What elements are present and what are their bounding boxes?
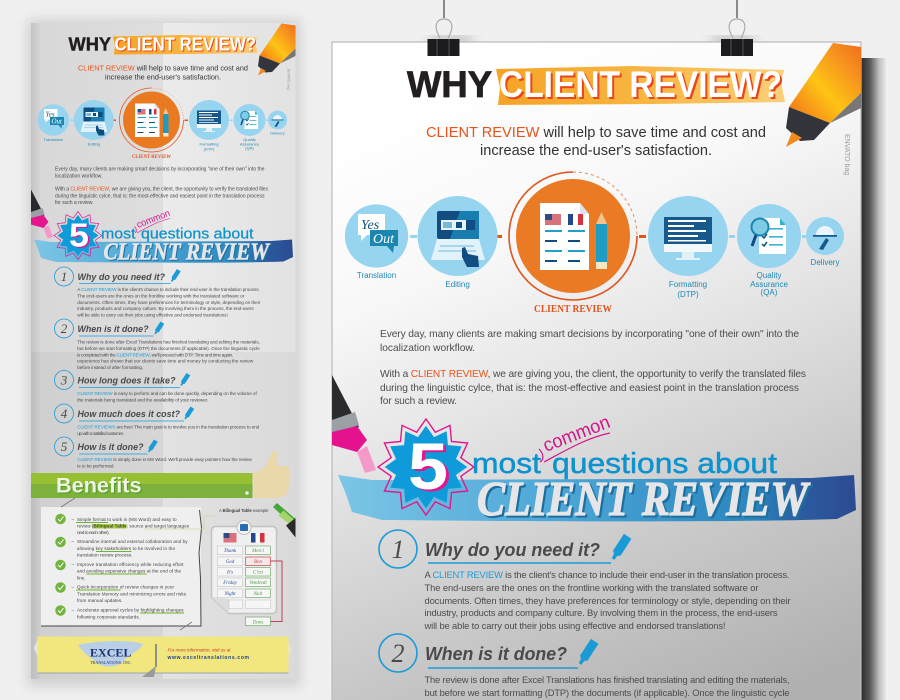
question 2: 2 xyxy=(61,321,68,336)
question 1: will be able to carry out their jobs using effective and endorsed translations! xyxy=(77,312,228,318)
question 3: 3 xyxy=(60,372,68,388)
benefits banner: Benefits xyxy=(56,474,141,498)
common: common xyxy=(135,208,172,231)
subtitle xyxy=(78,65,248,80)
question 3 xyxy=(54,370,257,402)
heading: 5 most common questions about client review: CLIENT REVIEW xyxy=(479,473,813,528)
title: CLIENT REVIEW? xyxy=(116,34,257,56)
question 1: documents. Often times, they have preferences for terminology or style, depending on their xyxy=(424,595,790,606)
benefit items: – xyxy=(72,539,74,544)
benefit items: Improve translation efficiency while reducing effort xyxy=(77,562,184,567)
question 2: is completed with the CLIENT REVIEW, we'll proceed with DTP. Time and time again, xyxy=(77,352,233,358)
highlights xyxy=(76,522,184,613)
title: CLIENT REVIEW? xyxy=(501,66,784,107)
panel: benefits checklist note xyxy=(41,498,217,630)
label: quality assurance: Assurance xyxy=(750,280,788,289)
footer banner: www.exceltranslations.com xyxy=(166,655,250,661)
question 1: 1 xyxy=(61,269,67,284)
question 4 xyxy=(54,404,260,436)
icon: translation xyxy=(37,104,69,136)
question 1: will be able to carry out their jobs using effective and endorsed translations! xyxy=(424,620,726,631)
label: quality assurance: (QA) xyxy=(245,146,254,150)
benefit items: following corporate standards. xyxy=(77,614,140,620)
question 2: When is it done? xyxy=(425,644,567,664)
question 2: The review is done after Excel Translations has finished translating and editing the materials, xyxy=(424,674,790,685)
benefit items: from manual updates. xyxy=(77,598,122,603)
question 2: When is it done? xyxy=(78,324,149,334)
label: quality assurance: (QA) xyxy=(761,288,778,297)
connector to table example xyxy=(144,516,217,529)
icon: quality assurance xyxy=(737,204,801,268)
badge: 5 star xyxy=(378,419,474,515)
question 5: 5 xyxy=(61,439,68,454)
title: WHY xyxy=(407,64,492,105)
question 3: CLIENT REVIEW is easy to perform and can be done quickly, depending on the volume of xyxy=(77,391,257,396)
question 1: documents. Often times, they have preferences for terminology or style, depending on their xyxy=(77,300,261,305)
intro paragraph 2 xyxy=(55,186,268,204)
panel: large poster close-up xyxy=(332,42,861,700)
benefit items: Quick incorporation of review changes in your xyxy=(77,584,174,590)
panel: bilingual table example: Vendredi xyxy=(249,581,267,586)
icon: formatting xyxy=(648,196,728,276)
benefits banner: Benefits xyxy=(57,476,142,498)
intro paragraph 2: during the linguistic cylce, that is: the most-effective and easiest point in the translation process xyxy=(55,194,265,200)
connectors xyxy=(70,120,268,121)
icon: delivery xyxy=(268,110,287,130)
question 1: The end-users are the ones on the frontline working with the translated software or xyxy=(77,294,245,298)
label: delivery: Delivery xyxy=(270,130,285,136)
panel: bilingual table example xyxy=(212,508,282,626)
panel: bilingual table example: Merci xyxy=(251,549,264,554)
icon: editing xyxy=(418,196,498,276)
check icons xyxy=(55,514,66,616)
question 2: 2 xyxy=(392,639,404,668)
benefit items xyxy=(72,517,190,620)
question 2: The review is done after Excel Translations has finished translating and editing the materials, xyxy=(77,340,260,344)
icon: orange marker xyxy=(786,43,861,147)
clip shadows xyxy=(430,36,754,44)
icon: orange marker xyxy=(258,24,296,76)
intro paragraph 2: during the linguistic cylce, that is: the most-effective and easiest point in the translation process xyxy=(380,383,799,394)
logo xyxy=(78,641,143,667)
logo: TRANSLATIONS, INC. xyxy=(90,660,132,666)
benefit items: translation review process. xyxy=(77,552,132,558)
icon: formatting xyxy=(189,100,229,140)
label: editing: Editing xyxy=(88,142,100,146)
label: quality assurance: Quality xyxy=(243,137,256,142)
label: delivery: Delivery xyxy=(811,258,839,267)
panel: bilingual table example: Friday xyxy=(222,581,238,586)
badge: 5 star: 5 xyxy=(69,216,89,254)
benefit items: Streamline internal and external collaboration and by xyxy=(77,539,188,544)
icon: quality assurance xyxy=(234,104,266,136)
heading: 5 most common questions about client review xyxy=(34,211,293,263)
question 1: A CLIENT REVIEW is the client's chance to include their end-user in the translation process. xyxy=(424,569,790,580)
common xyxy=(134,211,170,234)
label: quality assurance: Assurance xyxy=(240,142,260,146)
heading: 5 most common questions about client review xyxy=(338,412,856,528)
label: quality assurance xyxy=(750,271,788,297)
question 1 xyxy=(379,530,790,631)
intro paragraph 2: With a CLIENT REVIEW, we are giving you, the client, the opportunity to verify the translated files xyxy=(55,186,268,192)
label: formatting: (DTP) xyxy=(677,290,699,299)
icon: translation: Out xyxy=(52,118,63,126)
intro paragraph 1: localization workflow. xyxy=(380,343,475,354)
intro paragraph 2 xyxy=(380,369,806,407)
benefit items: next to each other). xyxy=(77,530,110,535)
icon: binder clip left xyxy=(428,0,460,56)
panel: bilingual table example: Bon xyxy=(254,560,263,565)
icon: thumbs up xyxy=(254,451,290,498)
question 1: A CLIENT REVIEW is the client's chance to include their end-user in the translation process. xyxy=(77,287,260,292)
panel: bilingual table example: Dans xyxy=(252,620,263,626)
label: editing: Editing xyxy=(445,280,470,289)
subtitle: increase the end-user's satisfaction. xyxy=(105,72,221,82)
connectors xyxy=(410,235,806,238)
label: formatting xyxy=(200,143,218,152)
benefit items: allowing key stakeholders to be involved in the xyxy=(77,546,175,551)
benefit items: – xyxy=(72,608,74,612)
question 3: How long does it take? xyxy=(78,376,176,386)
benefit items: and avoiding expensive changes at the end of the xyxy=(77,568,181,574)
intro paragraph 2: for such a review. xyxy=(55,200,94,206)
benefit items: Simple format to work in (MS Word) and easy to xyxy=(77,517,177,522)
icon: client review document xyxy=(509,172,637,300)
title: CLIENT REVIEW? xyxy=(114,34,256,54)
badge: 5 star: 5 xyxy=(70,218,90,254)
label: formatting: Formatting xyxy=(199,142,219,146)
panel: bilingual table example: Nuit xyxy=(253,592,263,597)
icon: editing xyxy=(74,100,114,140)
question 4: up with a satisfied customer. xyxy=(77,431,124,436)
benefit items: line. xyxy=(77,576,86,580)
benefit items: – xyxy=(72,562,74,567)
panel: bilingual table example: C'est xyxy=(253,570,264,576)
title: CLIENT REVIEW? xyxy=(499,64,782,105)
badge: 5 star: 5 xyxy=(408,429,448,503)
question 2: experience has shown that our clients save time and money by conducting the review xyxy=(77,358,254,364)
benefit items: Translation Memory and minimizing errors and risks xyxy=(77,592,187,596)
small poster shadow xyxy=(27,19,301,687)
subtitle: increase the end-user's satisfaction. xyxy=(480,142,712,159)
label: translation: Translation xyxy=(43,137,63,142)
question 5 xyxy=(54,437,252,468)
heading: 5 most common questions about client review: CLIENT REVIEW xyxy=(104,240,272,266)
label: formatting xyxy=(669,280,707,299)
heading: 5 most common questions about client review: CLIENT REVIEW xyxy=(477,471,811,526)
label: client review: CLIENT REVIEW xyxy=(132,154,172,160)
icon: translation: Yes xyxy=(46,110,55,118)
panel: bilingual table example: It's xyxy=(226,570,233,576)
question 5: How is it done? xyxy=(78,442,144,452)
brush stroke xyxy=(34,240,293,263)
icon: pink marker xyxy=(31,190,53,238)
label: formatting: (DTP) xyxy=(204,146,215,152)
question 2 xyxy=(379,634,790,698)
brush stroke xyxy=(338,475,856,521)
question 1: Why do you need it? xyxy=(425,540,600,560)
icon: green marker xyxy=(273,503,296,538)
question 5: is to be performed. xyxy=(77,464,115,468)
heading: 5 most common questions about client review: most xyxy=(472,448,541,480)
subtitle xyxy=(426,124,766,159)
benefits banner xyxy=(31,473,252,498)
question 3: the materials being translated and the availability of your reviewer. xyxy=(77,398,208,402)
benefit items: – xyxy=(72,584,74,590)
subtitle: CLIENT REVIEW will help to save time and cost and xyxy=(426,124,766,141)
benefit items: – xyxy=(72,517,74,522)
intro paragraph 2: With a CLIENT REVIEW, we are giving you, the client, the opportunity to verify the translated files xyxy=(380,369,806,380)
intro paragraph 1 xyxy=(55,166,264,178)
heading: 5 most common questions about client review: questions about xyxy=(141,226,254,242)
intro paragraph 1: Every day, many clients are making smart decisions by incorporating "one of their own" into the xyxy=(55,166,265,172)
panel: bilingual table example: A Bilingual Table example xyxy=(219,508,269,513)
intro paragraph 1 xyxy=(380,329,799,354)
panel: bilingual table example: Thank xyxy=(224,549,237,554)
badge: 5 star: 5 xyxy=(411,431,451,505)
title xyxy=(68,35,258,54)
subtitle: CLIENT REVIEW will help to save time and cost and xyxy=(78,64,248,72)
icon: delivery xyxy=(806,217,844,255)
label: quality assurance: Quality xyxy=(757,271,781,280)
icon: translation: Out xyxy=(373,232,395,247)
credit: ENVATO bag xyxy=(843,134,850,175)
label: client review: CLIENT REVIEW xyxy=(534,304,612,315)
footer banner xyxy=(34,636,291,677)
question 2: but before we start formatting (DTP) the documents (if applicable). Once the linguistic cycle xyxy=(77,346,260,351)
badge: 5 star xyxy=(54,212,102,260)
title xyxy=(407,64,785,107)
question 2 xyxy=(54,319,260,370)
benefit items: review (Bilingual Table: source and target languages xyxy=(77,524,190,528)
question 1: 1 xyxy=(392,535,404,564)
intro paragraph 1: localization workflow. xyxy=(55,174,102,180)
icon: client review document xyxy=(120,88,184,152)
title: WHY xyxy=(68,34,112,54)
label: quality assurance xyxy=(240,138,259,150)
logo: EXCEL xyxy=(90,648,132,660)
credit: ENVATO bag xyxy=(286,69,290,90)
question 2: but before we start formatting (DTP) the documents (if applicable). Once the linguistic cycle xyxy=(424,687,790,698)
question 4: 4 xyxy=(61,406,68,421)
footer banner: For more information, visit us at xyxy=(168,648,231,654)
label: formatting: Formatting xyxy=(669,280,707,289)
question 4: How much does it cost? xyxy=(78,409,180,419)
icon: translation xyxy=(345,204,408,268)
question 2: before instead of after formatting. xyxy=(77,365,143,370)
common: common xyxy=(540,412,613,457)
question 1 xyxy=(54,267,261,318)
heading: 5 most common questions about client review: questions about xyxy=(552,448,777,480)
label: translation: Translation xyxy=(357,271,396,280)
question 1: industry, products and company culture. By involving them in the process, the end-users xyxy=(424,607,778,618)
intro paragraph 2: for such a review. xyxy=(380,396,457,407)
icon: translation: Yes xyxy=(361,218,380,233)
icon: binder clip right xyxy=(721,0,753,56)
benefit items: Accelerate approval cycles by highlighting changes xyxy=(77,608,184,612)
intro paragraph 1: Every day, many clients are making smart decisions by incorporating "one of their own" into the xyxy=(380,329,799,340)
panel: bilingual table example: God xyxy=(226,560,235,565)
icon: pink marker xyxy=(332,375,376,473)
question 5: CLIENT REVIEW is simply done in MS Word. We'll provide easy pointers how the review xyxy=(77,457,252,462)
question 1: The end-users are the ones on the frontline working with the translated software or xyxy=(424,582,758,593)
panel: small full infographic poster xyxy=(31,23,296,679)
question 4: CLIENT REVIEWS are free! The main goal is to involve you in the translation process to end xyxy=(77,424,260,430)
question 1: industry, products and company culture. By involving them in the process, the end-users xyxy=(77,306,254,311)
panel: bilingual table example: Night xyxy=(223,592,236,597)
heading: 5 most common questions about client review: CLIENT REVIEW xyxy=(104,238,271,266)
question 1: Why do you need it? xyxy=(78,272,165,282)
heading: 5 most common questions about client review: most xyxy=(101,226,136,242)
big poster shadow xyxy=(861,58,887,700)
